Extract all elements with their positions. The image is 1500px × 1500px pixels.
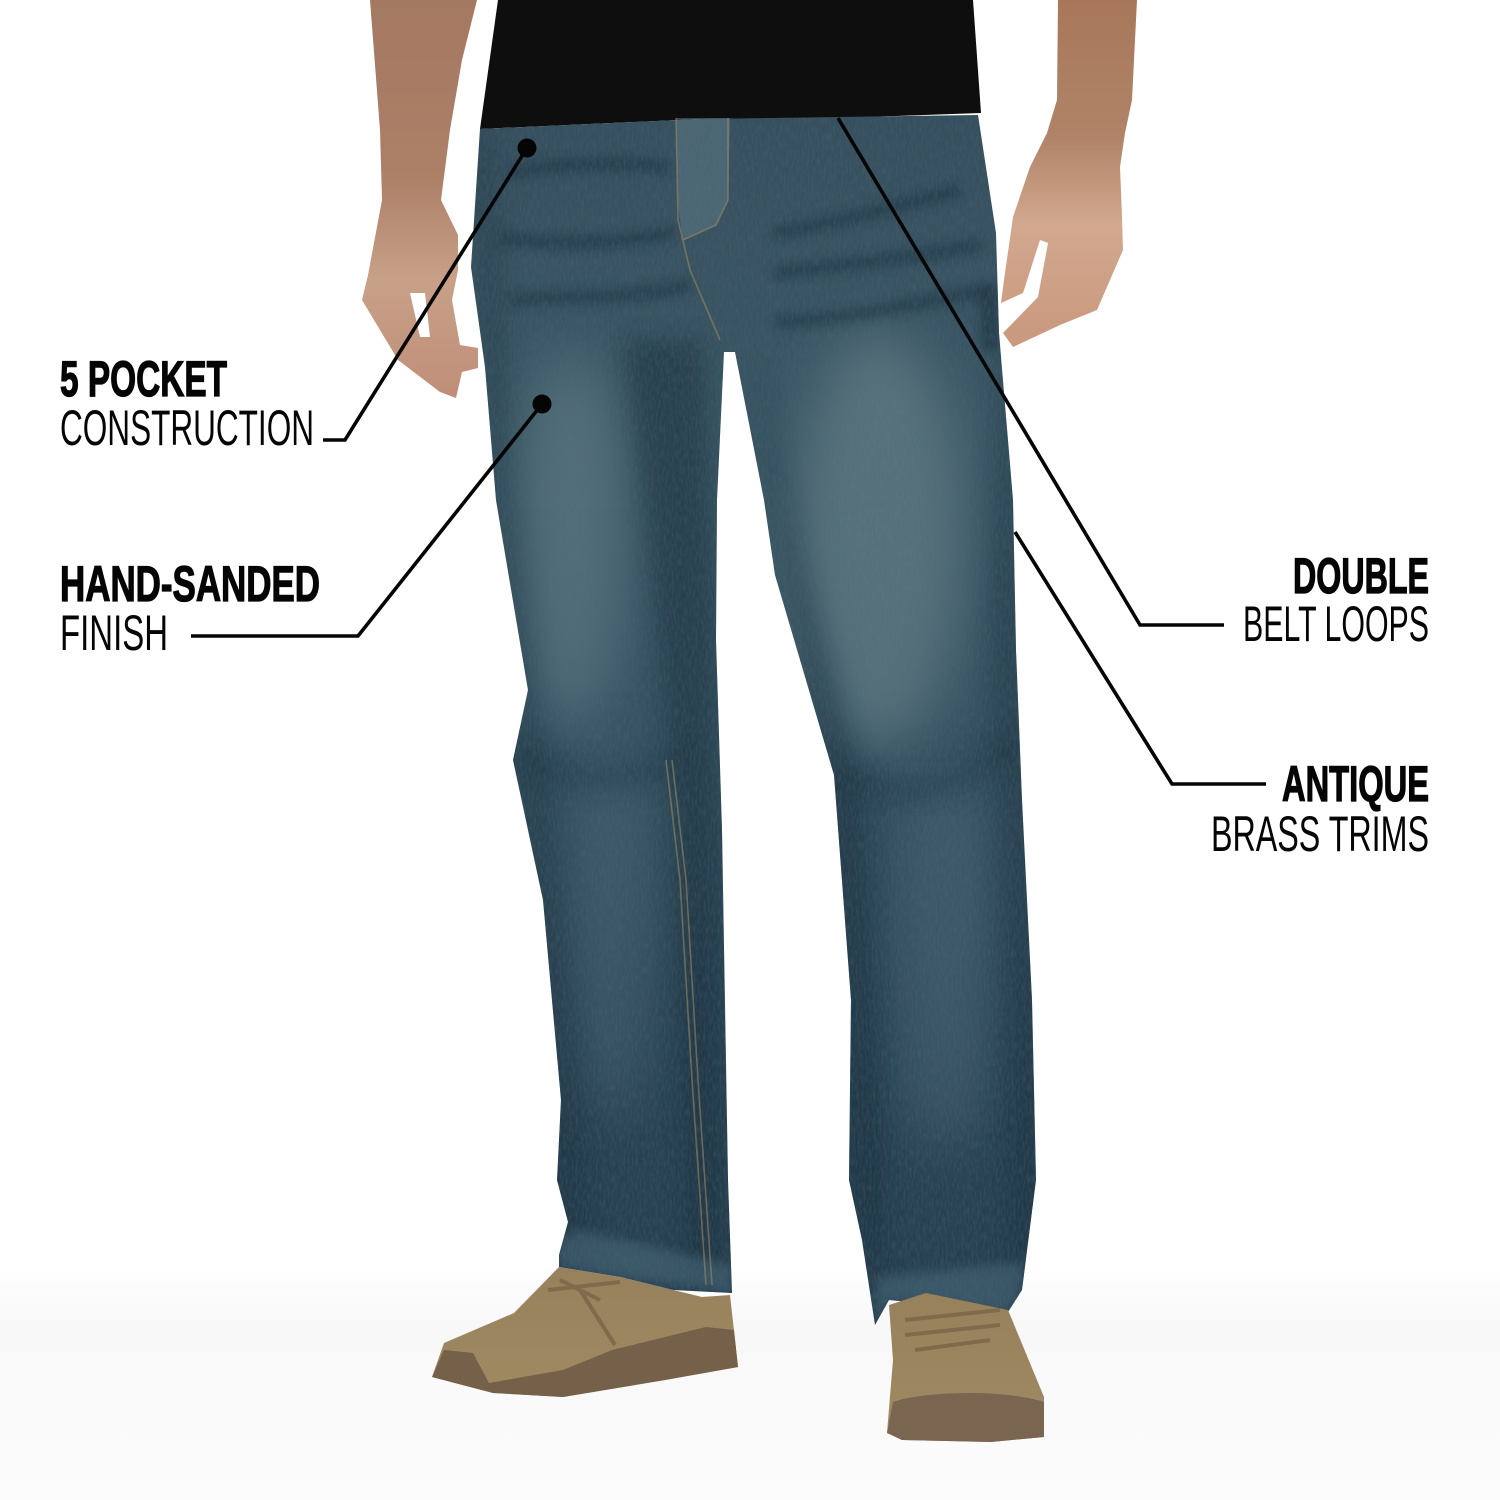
leader line [191,404,542,636]
fly placket [676,118,730,240]
label heading: 5 POCKET [60,351,227,407]
leader line [838,118,1224,625]
leader line [1015,532,1266,784]
callout: double belt loops [838,118,1429,652]
callout: 5 pocket construction [60,138,536,456]
toe cap and sole [887,1393,1044,1442]
label text: CONSTRUCTION [60,400,314,456]
floor shadow [0,1265,1500,1500]
jeans [460,110,1050,1330]
sole [432,1327,738,1397]
label text: FINISH [60,605,168,661]
left arm and hand [362,0,478,398]
black t-shirt [480,0,981,129]
laces [905,1310,1000,1350]
label heading: DOUBLE [1293,548,1429,604]
callout: hand-sanded finish [60,394,552,661]
leader line [323,148,527,440]
right arm and hand [1001,0,1137,347]
upper [432,1267,738,1397]
callout: antique brass trims [1015,532,1429,862]
upper [887,1293,1044,1442]
marker dot [532,394,552,414]
marker dot [518,138,536,158]
laces [548,1280,620,1345]
fabric grain [460,110,1050,1330]
figure: model wearing jeans [362,0,1137,1442]
cuffs [559,1230,1024,1325]
seams and stitching [666,118,728,1285]
label heading: HAND-SANDED [60,556,320,612]
right boot [887,1293,1044,1442]
left boot [432,1267,738,1397]
whisker creases [500,164,990,322]
